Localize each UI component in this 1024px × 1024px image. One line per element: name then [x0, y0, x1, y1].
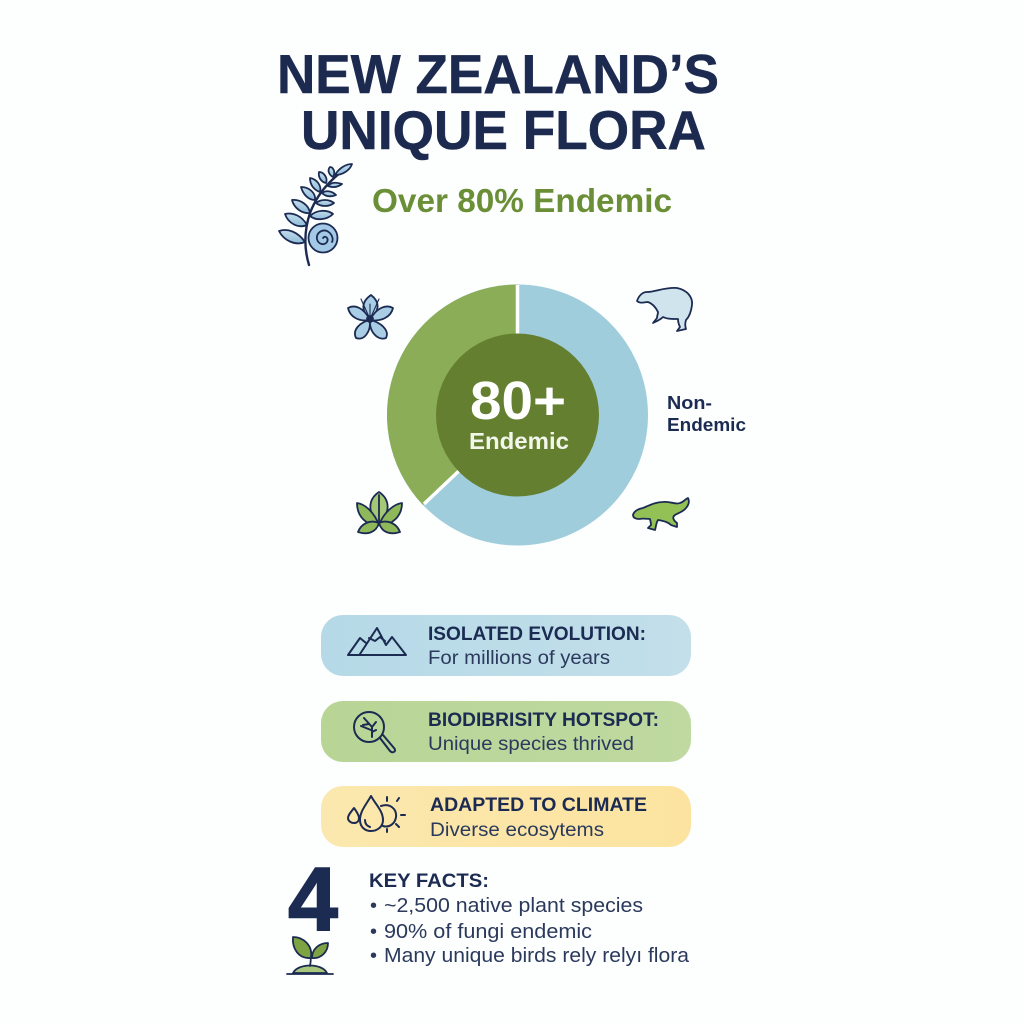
key facts: • [370, 921, 377, 943]
non-endemic label [667, 393, 746, 435]
icon: lizard [633, 498, 689, 530]
donut centre [436, 334, 599, 496]
panel: isolated evolution: For millions of years [428, 647, 610, 669]
panel: adapted to climate [321, 786, 691, 847]
panel: isolated evolution [321, 615, 691, 676]
subtitle: Over 80% Endemic [372, 182, 672, 219]
centre value: 80+ [470, 371, 566, 431]
panel: biodiversity hotspot: Unique species thrived [428, 733, 634, 755]
icon: magnifier with leaf [354, 712, 395, 752]
key facts: Many unique birds rely relyı flora [384, 945, 690, 967]
icon: water drops and sun [348, 796, 405, 832]
big number 4: 4 [288, 850, 338, 950]
key facts: • [370, 895, 377, 917]
panel: biodiversity hotspot: BIODIBRISITY HOTSPOT: [428, 710, 659, 731]
icon: kiwi bird [637, 288, 692, 331]
panel: adapted to climate: Diverse ecosytems [430, 819, 604, 841]
icon: flower [348, 295, 393, 339]
key facts: KEY FACTS: [369, 871, 489, 892]
panel: adapted to climate: ADAPTED TO CLIMATE [430, 795, 647, 816]
key facts: 90% of fungi endemic [384, 921, 592, 943]
panel: biodiversity hotspot [321, 701, 691, 762]
title [277, 43, 719, 161]
panel: isolated evolution: ISOLATED EVOLUTION: [428, 624, 646, 645]
donut chart [387, 284, 648, 546]
icon: mountains [348, 628, 406, 655]
title: UNIQUE FLORA [301, 99, 706, 161]
key facts: • [370, 945, 377, 967]
centre label: Endemic [469, 428, 569, 454]
non-endemic label: Non- [667, 393, 712, 413]
key facts [369, 871, 690, 967]
key facts: ~2,500 native plant species [384, 895, 643, 917]
title: NEW ZEALAND’S [277, 43, 719, 105]
donut segment: green [387, 284, 518, 505]
icon: fern with koru [279, 164, 352, 265]
icon: seedling [287, 937, 333, 974]
icon: leaf cluster [357, 492, 402, 533]
non-endemic label: Endemic [667, 415, 746, 435]
